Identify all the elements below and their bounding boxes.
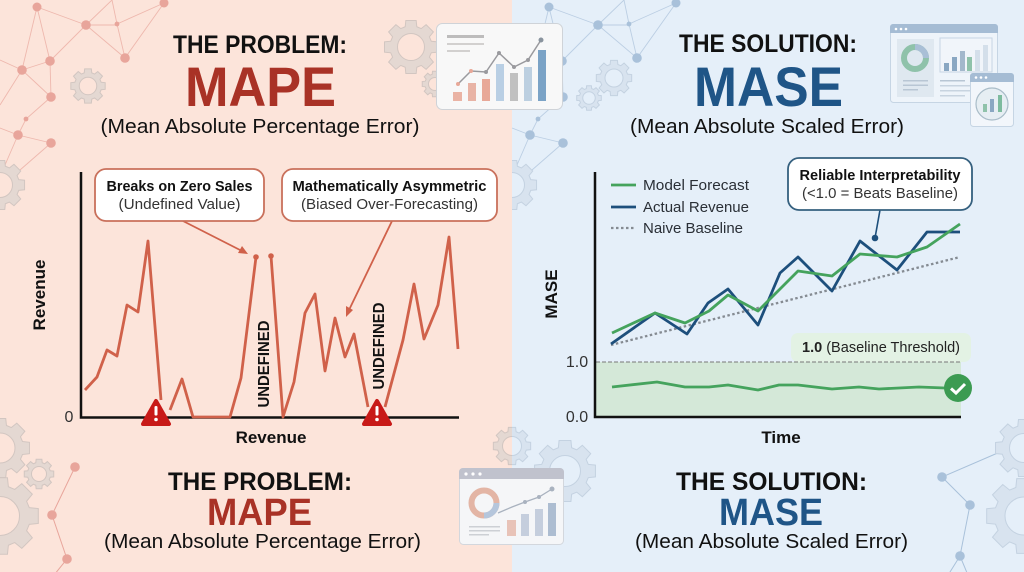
heading: top solution: THE SOLUTION: xyxy=(679,30,857,58)
axis labels: Time xyxy=(761,428,801,447)
arrow: zero sales xyxy=(183,221,248,254)
network decoration: bottom right xyxy=(937,452,1000,572)
heading: top solution xyxy=(630,30,904,138)
axis labels: MASE xyxy=(542,269,561,319)
undefined labels xyxy=(256,302,388,408)
leader: interpretability xyxy=(872,210,880,241)
heading: bottom problem: THE PROBLEM: xyxy=(168,468,352,496)
axis labels xyxy=(542,269,801,447)
network decoration: bottom left xyxy=(47,462,80,572)
icon: warning triangle 1 xyxy=(143,401,169,424)
naive baseline xyxy=(611,257,960,345)
axis labels: 1.0 xyxy=(566,354,588,371)
callout: reliable interpretability: Reliable Interpretability xyxy=(800,168,960,184)
network decoration: problem xyxy=(0,0,168,170)
chart: MAPE revenue line xyxy=(30,169,497,447)
callout: reliable interpretability xyxy=(788,158,972,210)
gears: problem panel xyxy=(0,20,531,554)
threshold label: 1.0 (Baseline Threshold) xyxy=(802,339,960,356)
scaled error line xyxy=(612,382,945,390)
callout: reliable interpretability: (<1.0 = Beats Baseline) xyxy=(802,186,958,202)
heading: top solution: MASE xyxy=(694,55,843,118)
heading: top problem xyxy=(100,31,420,138)
model forecast line xyxy=(612,224,960,333)
legend: Actual Revenue xyxy=(643,199,749,216)
icon: warning triangle 2 xyxy=(364,401,390,424)
legend: Naive Baseline xyxy=(643,220,743,237)
actual revenue line xyxy=(611,232,960,344)
heading: bottom solution xyxy=(635,468,908,553)
revenue line xyxy=(85,237,458,417)
heading: bottom problem xyxy=(104,468,421,553)
legend: Model Forecast xyxy=(643,177,750,194)
heading: top solution: (Mean Absolute Scaled Error) xyxy=(630,115,904,138)
callout: breaks on zero sales: Breaks on Zero Sales xyxy=(106,179,252,195)
heading: bottom problem: MAPE xyxy=(207,492,312,534)
heading: bottom solution: MASE xyxy=(719,492,823,534)
safe zone xyxy=(596,362,961,417)
undefined labels: UNDEFINED xyxy=(256,320,273,408)
undefined labels: UNDEFINED xyxy=(371,302,388,390)
axis labels: 0.0 xyxy=(566,409,588,426)
icon: top dashboard card xyxy=(436,24,562,110)
icon: check badge xyxy=(944,374,972,402)
arrow: asymmetric xyxy=(346,221,392,317)
callout: mathematically asymmetric: (Biased Over-Forecasting) xyxy=(301,197,478,213)
callout: mathematically asymmetric: Mathematically Asymmetric xyxy=(292,179,486,195)
axis labels: Revenue xyxy=(30,260,49,330)
gears: solution panel xyxy=(487,60,1024,553)
chart: MASE forecast xyxy=(542,158,972,447)
heading: top problem: (Mean Absolute Percentage Error) xyxy=(100,115,420,138)
legend xyxy=(611,177,750,237)
icon: solution small card xyxy=(970,73,1014,126)
threshold label xyxy=(791,333,971,362)
icon: solution dashboard window xyxy=(890,24,998,102)
icon: bottom dashboard card xyxy=(459,468,564,544)
heading: bottom problem: (Mean Absolute Percentage Error) xyxy=(104,530,421,553)
heading: bottom solution: (Mean Absolute Scaled Error) xyxy=(635,530,908,553)
callout: breaks on zero sales xyxy=(95,169,264,221)
network decoration: solution xyxy=(512,0,680,170)
callout: breaks on zero sales: (Undefined Value) xyxy=(118,197,240,213)
panel: problem background xyxy=(0,0,512,572)
heading: bottom solution: THE SOLUTION: xyxy=(676,468,867,496)
axis labels: 0 xyxy=(65,409,74,426)
axis labels: Revenue xyxy=(236,428,306,447)
panel: solution background xyxy=(512,0,1024,572)
axis labels xyxy=(30,260,306,447)
callout: mathematically asymmetric xyxy=(282,169,497,221)
heading: top problem: THE PROBLEM: xyxy=(173,31,347,59)
heading: top problem: MAPE xyxy=(185,55,336,118)
